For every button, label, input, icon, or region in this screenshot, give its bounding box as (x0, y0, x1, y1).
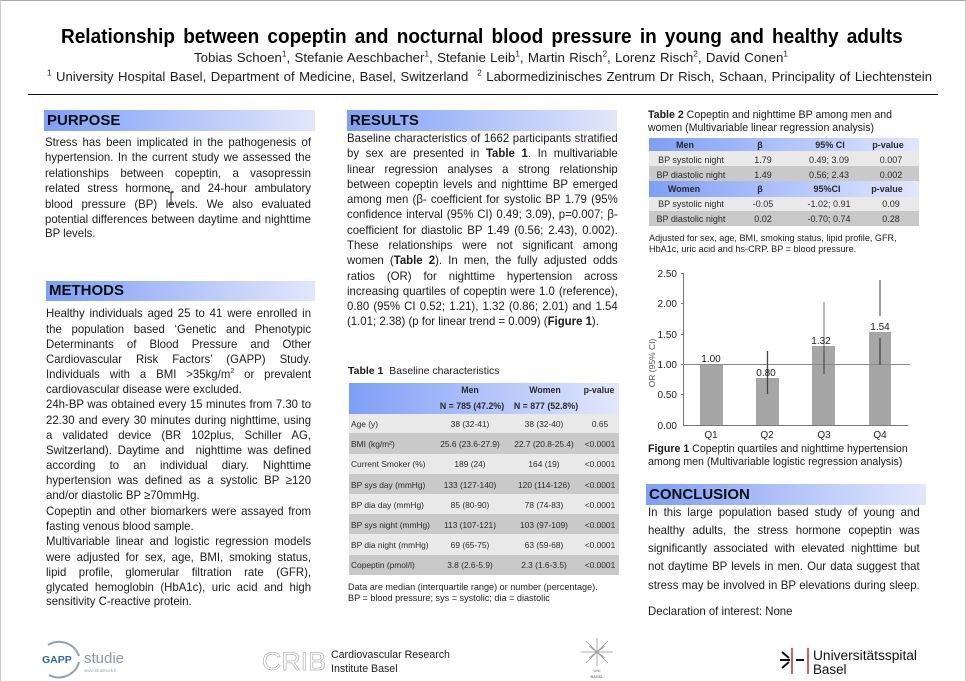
figure 1 caption (648, 443, 908, 468)
table 1: 113 (107-121) (444, 520, 496, 530)
text: methods: glycated hemoglobin (HbA1c), uric acid and high (46, 580, 311, 594)
axis labels: Q2 (760, 430, 774, 441)
authors: Tobias Schoen1, Stefanie Aeschbacher1, Stefanie Leib1, Martin Risch2, Lorenz Risch2, David Conen1 (194, 50, 788, 65)
axis labels: 0.00 (658, 421, 677, 432)
text: purpose: hypertension. In the current study we assessed the (45, 150, 311, 164)
logo: GAPP studie: GAPP (42, 654, 72, 666)
table 1: 103 (97-109) (520, 520, 568, 530)
axis labels: 0.80 (756, 368, 776, 379)
table 1 (349, 383, 619, 575)
text: methods: cardiovascular disease were excluded. (46, 382, 242, 396)
table 2: 1.79 (754, 155, 772, 165)
table 1: Current Smoker (%) (351, 459, 426, 469)
logo: GAPP studie: studie (84, 650, 124, 667)
table 1: 38 (32-40) (525, 419, 564, 429)
table 1: <0.0001 (585, 520, 616, 530)
table 2: 0.09 (882, 199, 900, 209)
heading: results (347, 110, 617, 131)
error bars (768, 280, 880, 394)
text: results (347, 131, 618, 328)
reference line (683, 364, 910, 366)
table 1: 120 (114-126) (518, 480, 570, 490)
text: conclusion (648, 505, 920, 618)
table 2: 0.007 (880, 155, 902, 165)
logo text: Cardiovascular Research Institute Basel: Institute Basel (331, 663, 398, 675)
table 1: <0.0001 (585, 560, 616, 570)
text: methods: lipid profile, glomerular filtration rate (GFR), (46, 565, 311, 579)
text: purpose: relationships between copeptin, a vasopressin (45, 166, 311, 180)
table 1: 85 (80-90) (451, 500, 490, 510)
table 2: -0.05 (753, 199, 773, 209)
table 1: BP dia day (mmHg) (351, 500, 424, 510)
table 1: 69 (65-75) (451, 540, 490, 550)
table 2: BP systolic night (658, 155, 724, 165)
bar chart: odds ratio by copeptin quartile: OR (95% CI) (647, 339, 657, 387)
table 1: 3.8 (2.6-5.9) (447, 560, 493, 570)
text: results: by sex are presented in Table 1. In multivariable (347, 146, 618, 160)
text: results: 0.80 (95% CI 0.52; 1.21), 1.32 (0.86; 2.01) and 1.54 (347, 299, 618, 313)
bars (700, 332, 891, 425)
heading: purpose (44, 110, 315, 131)
table 2 title: women (Multivariable linear regression analysis) (648, 122, 874, 134)
table 1: Copeptin (pmol/l) (351, 560, 415, 570)
text: results: confidence interval (95% CI) 0.49; 3.09), p=0.007; β- (347, 207, 618, 221)
axis labels: 2.00 (658, 299, 677, 310)
text: methods: the population based ‘Genetic and Phenotypic (46, 322, 311, 336)
table 1: Women (529, 385, 561, 395)
logo: GAPP studie (42, 640, 124, 678)
table 2: -0.70; 0.74 (807, 214, 851, 224)
axis labels: 0.50 (658, 390, 677, 401)
table 2: BP diastolic night (657, 170, 726, 180)
table 2: -1.02; 0.91 (807, 199, 851, 209)
text: results: (1.01; 2.38) (p for linear trend = 0.009) (Figure 1). (347, 314, 599, 328)
table 1: <0.0001 (585, 540, 616, 550)
table 1: <0.0001 (585, 459, 616, 469)
table 2: 0.49; 3.09 (809, 155, 849, 165)
text: methods: 24h-BP was obtained every 15 minutes from 7.30 to (46, 397, 311, 411)
text: purpose (45, 135, 312, 240)
table 2: p-value (872, 140, 904, 150)
text: methods: were adjusted for sex, age, BMI, smoking status, (46, 550, 311, 564)
table 1 note: Data are median (interquartile range) or number (percentage). (348, 582, 598, 592)
table 1: Age (y) (351, 419, 378, 429)
table 1: 0.65 (592, 419, 608, 429)
y axis (681, 273, 908, 426)
table 1: <0.0001 (585, 500, 616, 510)
table 2: 0.56; 2.43 (809, 170, 849, 180)
table 2: 1.49 (754, 170, 772, 180)
table 1 title: Table 1 Baseline characteristics (348, 365, 500, 377)
axis labels: Q3 (817, 430, 831, 441)
bar chart: odds ratio by copeptin quartile (647, 269, 910, 441)
text: purpose: Stress has been implicated in the pathogenesis of (45, 135, 311, 149)
heading: conclusion (646, 484, 926, 505)
table 2: p-value (871, 184, 903, 194)
table 1 note: BP = blood pressure; sys = systolic; dia = diastolic (348, 593, 550, 603)
text: conclusion: significantly associated with elevated nighttime but (648, 541, 920, 555)
text: results: These relationships were not significant among (347, 238, 618, 252)
heading: results: RESULTS (350, 112, 419, 129)
text: methods: sensitivity C-reactive protein. (46, 594, 192, 608)
table 1: Men (461, 385, 479, 395)
text: methods (46, 306, 311, 608)
table 2: 0.02 (754, 214, 772, 224)
text: methods: and/or diastolic BP ≥70mmHg. (46, 488, 200, 502)
logo: Universitätsspital Basel: Universitätsspital (813, 648, 917, 663)
table 1: BP sys night (mmHg) (351, 520, 430, 530)
text: methods: fasting venous blood sample. (46, 519, 194, 533)
text: methods: hypertension was defined as a systolic BP ≥120 (46, 473, 311, 487)
logo: Uni Basel: UNI (594, 668, 600, 673)
table 2: 95% CI (815, 140, 845, 150)
table 1: 2.3 (1.6-3.5) (521, 560, 567, 570)
table 2: β (757, 184, 763, 194)
table 2 note: HbA1c, uric acid and hs-CRP. BP = blood pressure. (649, 244, 856, 254)
table 2: BP systolic night (658, 199, 724, 209)
text: methods: according to an individual diary. Nighttime (46, 458, 311, 472)
table 1: 22.7 (20.8-25.4) (514, 439, 574, 449)
axis labels: 1.50 (658, 330, 677, 341)
table 2: 0.002 (880, 170, 902, 180)
header rule (28, 94, 938, 95)
text: methods: a validated device (BR 102plus, Schiller AG, (46, 428, 311, 442)
table 2: 95%CI (813, 184, 841, 194)
table 1: <0.0001 (585, 439, 616, 449)
table 2 note: Adjusted for sex, age, BMI, smoking status, lipid profile, GFR, (649, 233, 897, 243)
table 1 note (348, 582, 598, 603)
table 1: N = 785 (47.2%) (440, 401, 504, 411)
table 1: 78 (74-83) (525, 500, 564, 510)
title: Relationship between copeptin and nocturnal blood pressure in young and healthy adults (61, 26, 903, 48)
text: results: increasing quartiles of copeptin were 1.0 (reference), (347, 284, 618, 298)
text: methods: 22.30 and every 30 minutes during nighttime, using (46, 413, 311, 427)
text: conclusion: healthy adults, the stress hormone copeptin was (648, 523, 920, 537)
text: results: ratios (OR) for nighttime hypertension across (347, 269, 618, 283)
text: results: between copeptin levels and nighttime BP emerged (347, 177, 618, 191)
table 1: N = 877 (52.8%) (514, 401, 578, 411)
text: methods: Cardiovascular Risk Factors’ (GAPP) Study. (46, 352, 311, 366)
figure 1 caption: among men (Multivariable logistic regression analysis) (648, 456, 902, 468)
text: methods: Determinants of Blood Pressure and Other (46, 337, 311, 351)
table 1: 164 (19) (528, 459, 560, 469)
table 1: BP dia night (mmHg) (351, 540, 429, 550)
table 2 (649, 138, 919, 226)
logo: Universitätsspital Basel (780, 648, 917, 676)
table 1: 189 (24) (454, 459, 486, 469)
text: purpose: related stress hormone, and 24-hour ambulatory (45, 181, 311, 195)
table 1: BP sys day (mmHg) (351, 480, 426, 490)
text: results: Baseline characteristics of 1662 participants stratified (347, 131, 618, 145)
figure 1 caption: Figure 1 Copeptin quartiles and nighttime hypertension (648, 443, 908, 455)
logo text: Cardiovascular Research Institute Basel (331, 649, 450, 675)
text: conclusion: In this large population based study of young and (648, 505, 920, 519)
table 2: BP diastolic night (657, 214, 726, 224)
table 2: β (757, 140, 763, 150)
text: results: among men (β- coefficient for systolic BP 1.79 (95% (347, 192, 618, 206)
axis labels: Q1 (704, 430, 718, 441)
text: methods: Individuals with a BMI >35kg/m2 or prevalent (46, 366, 311, 381)
table 2: Men (676, 140, 694, 150)
table 1: p-value (584, 385, 614, 395)
text: methods: Healthy individuals aged 25 to 41 were enrolled in (46, 306, 311, 320)
table 1: 63 (59-68) (525, 540, 564, 550)
logo: Uni Basel: BASEL (591, 674, 604, 679)
heading: methods: METHODS (49, 282, 124, 299)
axis labels: 1.00 (658, 360, 677, 371)
text: methods: Multivariable linear and logistic regression models (46, 534, 311, 548)
heading: methods (46, 281, 315, 301)
table 1: 38 (32-41) (451, 419, 490, 429)
table 1: BMI (kg/m²) (351, 439, 395, 449)
logo: GAPP studie: www.blutdruck.li (84, 668, 116, 673)
text: methods: Switzerland). Daytime and nighttime was defined (46, 443, 311, 457)
axis labels: 1.00 (701, 354, 721, 365)
axis labels: 1.32 (811, 336, 831, 347)
axis labels: Q4 (873, 430, 887, 441)
text: purpose: blood pressure (BP) levels. We also evaluated (45, 197, 311, 211)
heading: conclusion: CONCLUSION (649, 486, 750, 503)
text: purpose: potential differences between daytime and nighttime (45, 212, 311, 226)
text: conclusion: Declaration of interest: None (648, 604, 792, 618)
text: results: women (Table 2). In men, the fully adjusted odds (347, 253, 618, 267)
text: conclusion: not daytime BP levels in men. Our data suggest that (648, 559, 920, 573)
heading: purpose: PURPOSE (47, 112, 120, 129)
axis labels (658, 269, 890, 441)
text: purpose: BP levels. (45, 226, 95, 240)
table 2 note (649, 233, 897, 254)
logo text: Cardiovascular Research Institute Basel: Cardiovascular Research (331, 649, 450, 661)
text: conclusion: stress may be involved in BP elevations during sleep. (648, 578, 920, 592)
logo: Uni Basel (581, 638, 613, 679)
table 2: Women (668, 184, 700, 194)
text: results: coefficient for diastolic BP 1.49 (0.56; 2.43), 0.002). (347, 223, 618, 237)
table 1: 25.6 (23.6-27.9) (440, 439, 500, 449)
table 1: 133 (127-140) (444, 480, 497, 490)
table 2 title (648, 109, 892, 134)
text: methods: Copeptin and other biomarkers were assayed from (46, 504, 311, 518)
table 2 title: Table 2 Copeptin and nighttime BP among men and (648, 109, 892, 121)
text: results: linear regression analyses a strong relationship (347, 162, 618, 176)
table 1: <0.0001 (585, 480, 616, 490)
icon: text cursor (168, 192, 174, 204)
axis labels: 1.54 (870, 322, 890, 333)
axis labels: 2.50 (658, 269, 677, 280)
table 2: 0.28 (882, 214, 900, 224)
affiliations: 1 University Hospital Basel, Department of Medicine, Basel, Switzerland 2 Labormedizinisches Zentrum Dr Risch, Schaan, Principality of Liechtenstein (47, 69, 932, 84)
